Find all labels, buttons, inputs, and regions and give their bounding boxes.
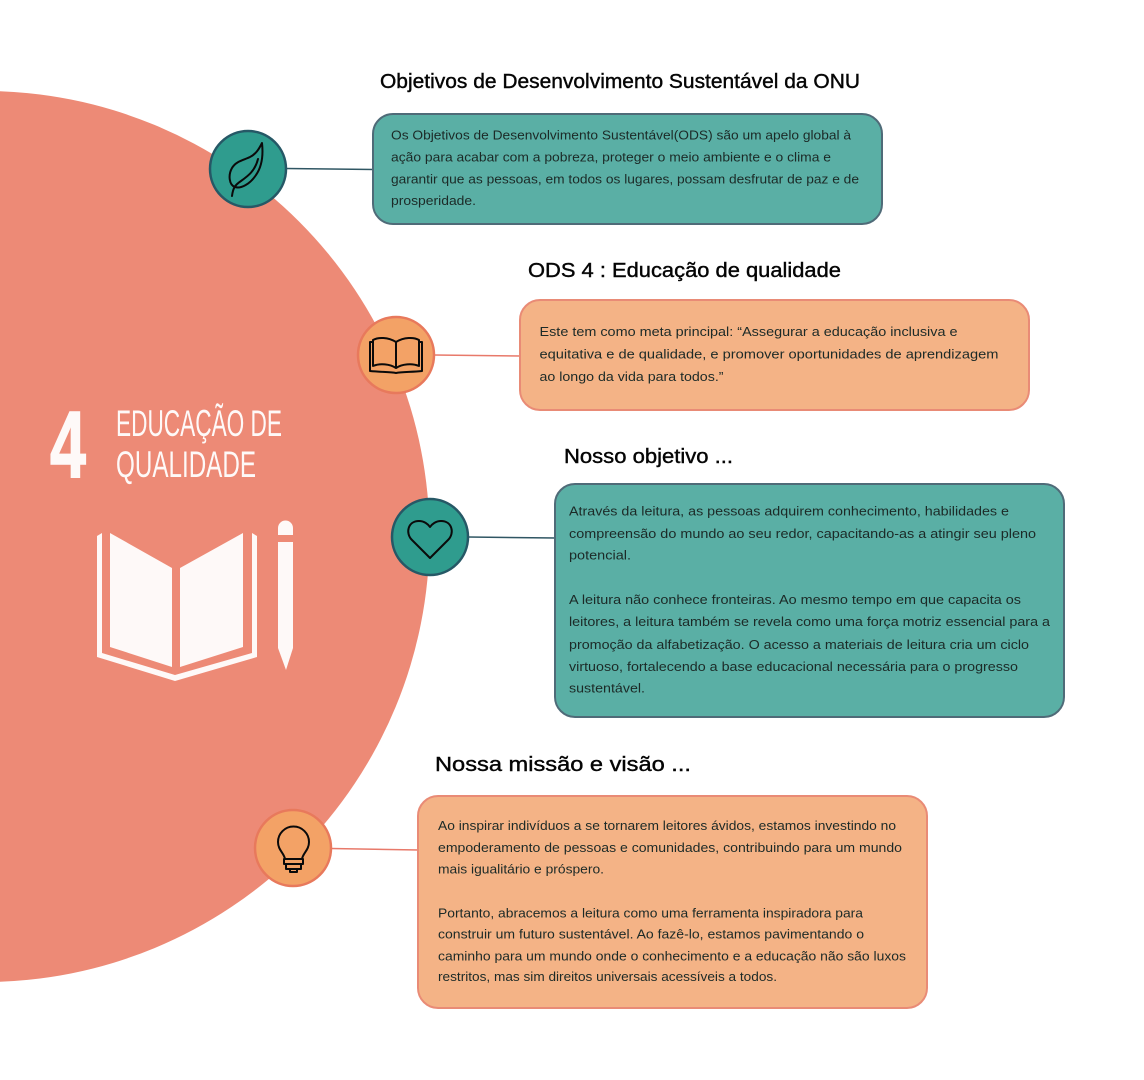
card text: mais igualitário e próspero.: [438, 862, 604, 876]
icon: open book and pencil: [97, 520, 293, 681]
card text: construir um futuro sustentável. Ao fazê-lo, estamos pavimentando o: [438, 926, 864, 942]
card text: caminho para um mundo onde o conhecimento e a educação não são luxos: [438, 948, 907, 964]
connector: book to box 2: [434, 355, 521, 356]
card text: promoção da alfabetização. O acesso a materiais de leitura cria um ciclo: [569, 637, 1029, 652]
heading: Nosso objetivo ...: [564, 446, 733, 468]
heading: Objetivos de Desenvolvimento Sustentável da ONU: [380, 71, 860, 93]
logo title: QUALIDADE: [116, 444, 256, 485]
icon: leaf badge: [210, 131, 286, 207]
card: [555, 484, 1064, 717]
logo title: [116, 403, 282, 485]
panel: Nosso objetivo: [555, 446, 1064, 717]
panel: Objetivos de Desenvolvimento Sustentável: [373, 71, 882, 224]
connector: heart to box 3: [468, 537, 556, 538]
card text: Ao inspirar indivíduos a se tornarem leitores ávidos, estamos investindo no: [438, 818, 896, 833]
card text: equitativa e de qualidade, e promover oportunidades de aprendizagem: [540, 346, 998, 362]
card text: Os Objetivos de Desenvolvimento Sustentável(ODS) são um apelo global à: [391, 128, 852, 142]
card text: prosperidade.: [391, 193, 476, 208]
panel: ODS 4: [520, 260, 1029, 410]
card text: sustentável.: [569, 680, 645, 696]
card text: ao longo da vida para todos.”: [540, 369, 724, 384]
panel: Nossa missão e visão: [418, 754, 927, 1008]
number 4: 4: [50, 392, 86, 499]
icon: book badge: [358, 317, 434, 393]
card text: [438, 818, 907, 984]
card: [373, 114, 882, 224]
heading: ODS 4 : Educação de qualidade: [528, 260, 841, 282]
card text: leitores, a leitura também se revela como uma força motriz essencial para a: [569, 614, 1051, 629]
card: [418, 796, 927, 1008]
card text: [540, 324, 998, 384]
SDG 4 logo: [50, 392, 293, 681]
card text: Portanto, abracemos a leitura como uma ferramenta inspiradora para: [438, 906, 864, 920]
card text: Através da leitura, as pessoas adquirem conhecimento, habilidades e: [569, 504, 1009, 518]
card text: ação para acabar com a pobreza, proteger o meio ambiente e o clima e: [391, 150, 831, 164]
icon: light bulb badge: [255, 810, 331, 886]
logo title: EDUCAÇÃO DE: [116, 403, 282, 444]
card text: virtuoso, fortalecendo a base educacional necessária para o progresso: [569, 659, 1018, 674]
card text: [391, 128, 859, 208]
card text: A leitura não conhece fronteiras. Ao mesmo tempo em que capacita os: [569, 592, 1022, 607]
connector: bulb to box 4: [331, 848, 419, 850]
icon: heart badge: [392, 499, 468, 575]
card text: Este tem como meta principal: “Assegurar a educação inclusiva e: [540, 324, 958, 339]
card: [520, 300, 1029, 410]
connector: leaf to box 1: [286, 168, 374, 170]
card text: potencial.: [569, 548, 631, 562]
heading: Nossa missão e visão ...: [435, 754, 691, 776]
card text: empoderamento de pessoas e comunidades, contribuindo para um mundo: [438, 840, 902, 855]
card text: restritos, mas sim direitos universais acessíveis a todos.: [438, 969, 777, 984]
card text: [569, 504, 1051, 696]
card text: garantir que as pessoas, em todos os lugares, possam desfrutar de paz e de: [391, 172, 859, 186]
card text: compreensão do mundo ao seu redor, capacitando-as a atingir seu pleno: [569, 526, 1036, 541]
large salmon semicircle: [0, 91, 430, 982]
